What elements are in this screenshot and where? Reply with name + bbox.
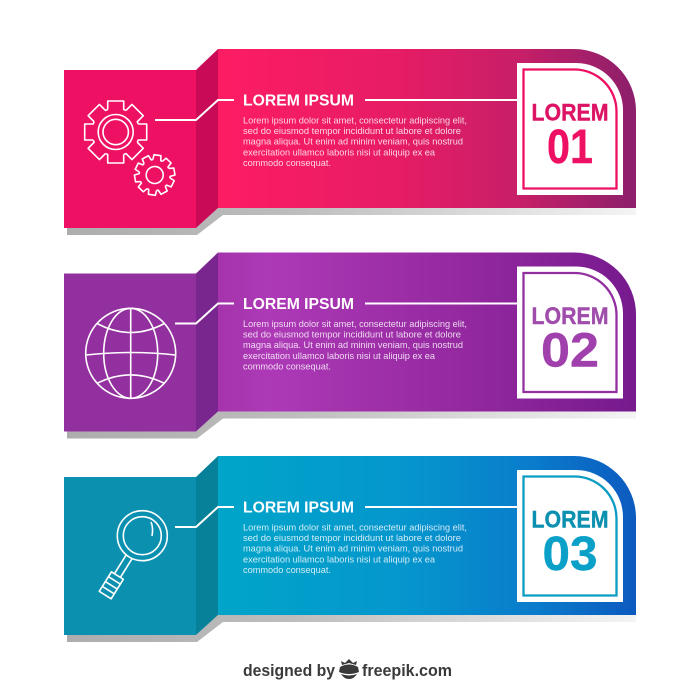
number card: 02 — [541, 324, 599, 378]
leader line — [175, 507, 234, 527]
body text — [243, 114, 467, 168]
fold — [196, 252, 218, 432]
leader line — [155, 100, 234, 120]
body text: sed do eiusmod tempor incididunt ut labore et dolore — [243, 125, 461, 136]
number card — [517, 266, 623, 398]
left panel — [64, 274, 196, 432]
body text: magna aliqua. Ut enim ad minim veniam, quis nostrud — [243, 543, 463, 554]
main band — [218, 252, 636, 412]
body text: sed do eiusmod tempor incididunt ut labore et dolore — [243, 532, 461, 543]
icon: freepik crown — [339, 659, 359, 679]
body text: Lorem ipsum dolor sit amet, consectetur adipiscing elit, — [243, 318, 467, 329]
heading: LOREM IPSUM — [243, 296, 354, 313]
number card: LOREM — [532, 100, 608, 126]
heading: LOREM IPSUM — [243, 500, 354, 517]
number card: LOREM — [532, 303, 608, 330]
shadow — [67, 412, 636, 438]
body text: magna aliqua. Ut enim ad minim veniam, quis nostrud — [243, 136, 463, 147]
body text: exercitation ullamco laboris nisi ut aliquip ex ea — [243, 350, 436, 361]
leader line — [175, 304, 234, 324]
body text: commodo consequat. — [243, 157, 331, 168]
body text: Lorem ipsum dolor sit amet, consectetur adipiscing elit, — [243, 114, 467, 126]
icon: magnifying glass — [99, 511, 167, 599]
body text — [243, 318, 467, 372]
panel: banner 03 — [64, 456, 636, 642]
footer: freepik credit: designed by — [243, 662, 336, 680]
icon: globe — [86, 308, 176, 398]
body text: magna aliqua. Ut enim ad minim veniam, quis nostrud — [243, 339, 463, 350]
number card — [517, 63, 623, 195]
left panel — [64, 70, 196, 228]
icon: gears — [85, 101, 178, 198]
shadow — [67, 208, 636, 235]
main band — [218, 456, 636, 615]
left panel — [64, 477, 196, 635]
heading: LOREM IPSUM — [243, 93, 354, 110]
footer: freepik credit — [243, 659, 452, 680]
main band — [218, 49, 636, 208]
panel: banner 01 — [64, 49, 636, 235]
body text: sed do eiusmod tempor incididunt ut labore et dolore — [243, 328, 461, 340]
shadow — [67, 615, 636, 642]
number card: 03 — [542, 528, 598, 581]
body text: commodo consequat. — [243, 360, 331, 372]
panel: banner 02 — [64, 252, 636, 438]
body text: exercitation ullamco laboris nisi ut aliquip ex ea — [243, 553, 436, 564]
number card: 01 — [547, 121, 593, 174]
body text: commodo consequat. — [243, 564, 331, 575]
number card: LOREM — [532, 506, 608, 534]
body text: exercitation ullamco laboris nisi ut aliquip ex ea — [243, 146, 436, 157]
body text — [243, 522, 467, 575]
heading rule — [365, 99, 518, 101]
body text: Lorem ipsum dolor sit amet, consectetur adipiscing elit, — [243, 522, 467, 532]
number card — [517, 470, 623, 602]
heading rule — [365, 506, 518, 508]
heading rule — [365, 302, 518, 304]
fold — [196, 456, 218, 635]
fold — [196, 49, 218, 228]
footer: freepik credit: freepik.com — [362, 662, 452, 680]
